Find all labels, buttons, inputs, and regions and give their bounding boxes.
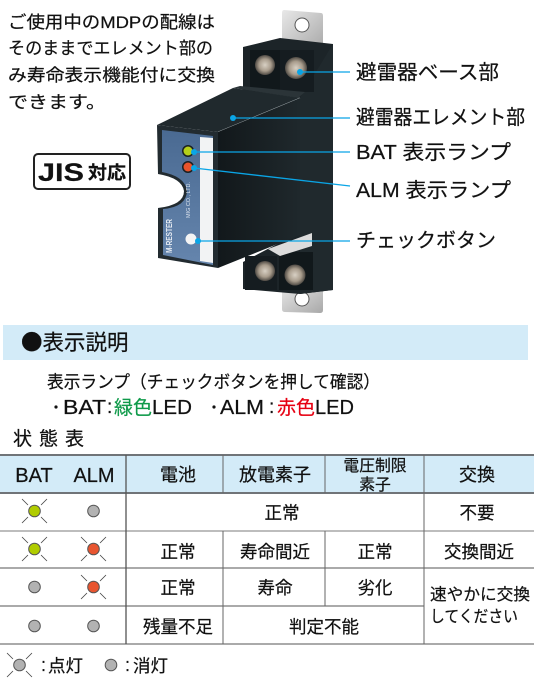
table header row: BAT xyxy=(15,465,53,487)
row 1 text xyxy=(264,503,494,523)
bottom terminals xyxy=(245,233,313,290)
row 3 text xyxy=(160,578,392,598)
lamp description: LED xyxy=(315,396,354,419)
product photo: surge arrester device xyxy=(157,10,333,313)
legend: 消灯 xyxy=(133,656,168,676)
callout: arrester element: 避雷器エレメント部 xyxy=(356,106,525,129)
lamp description: : xyxy=(107,397,112,418)
element front frame xyxy=(157,125,218,268)
ALM lamp xyxy=(182,161,194,173)
intro text: ご使用中のMDPの配線は xyxy=(8,12,215,32)
table grid xyxy=(0,455,534,644)
callout: ALM lamp: ALM 表示ランプ xyxy=(356,179,511,202)
legend: : xyxy=(125,655,130,675)
row 2 lamps xyxy=(22,537,106,561)
table header row: 交換 xyxy=(459,465,495,485)
callout: check button: チェックボタン xyxy=(356,229,496,252)
intro text: そのままでエレメント部の xyxy=(8,39,213,58)
brand label on panel: M-RESTER xyxy=(165,219,174,253)
table header row: 素子 xyxy=(359,476,391,494)
legend: 点灯 xyxy=(48,656,83,676)
lamp description: ALM xyxy=(220,396,264,419)
callout: arrester base: 避雷器ベース部 xyxy=(356,61,499,84)
table header row: 放電素子 xyxy=(239,465,311,485)
bottom mounting bracket xyxy=(282,285,323,313)
element top face xyxy=(157,88,300,132)
callout: check button xyxy=(195,229,496,252)
callout: arrester base xyxy=(297,61,499,84)
section heading bar xyxy=(3,325,528,360)
BAT lamp xyxy=(182,145,194,157)
lamp description: 表示ランプ（チェックボタンを押して確認） xyxy=(47,372,380,392)
row 4 text: 判定不能 xyxy=(289,617,359,637)
table header row: 電池 xyxy=(160,465,196,485)
row 4 lamps xyxy=(29,620,99,632)
row 4 text xyxy=(143,617,359,637)
legend xyxy=(7,653,168,677)
base rear body xyxy=(243,38,333,294)
row 1 text: 不要 xyxy=(460,503,494,523)
row 2 text: 正常 xyxy=(358,542,392,562)
callout: BAT lamp: BAT 表示ランプ xyxy=(356,141,511,164)
status table heading: 状態表 xyxy=(13,428,84,450)
lamp description xyxy=(47,372,380,419)
status table xyxy=(0,455,534,644)
row 2 text xyxy=(160,542,514,562)
check button xyxy=(186,234,196,244)
replace now merged cell xyxy=(430,585,530,626)
callout: arrester element xyxy=(230,106,525,129)
lamp description: 赤色 xyxy=(277,397,315,419)
lamp description: 緑色 xyxy=(114,397,152,419)
row 3 text: 劣化 xyxy=(358,578,392,598)
lamp description: : xyxy=(269,397,274,418)
intro text: み寿命表示機能付に交換 xyxy=(8,66,215,85)
JIS badge xyxy=(34,154,130,189)
callout: ALM lamp xyxy=(191,165,511,202)
row 2 text: 寿命間近 xyxy=(240,542,310,562)
replace now merged cell: してください xyxy=(430,607,518,626)
section heading bar: ●表示説明 xyxy=(21,326,129,357)
legend: : xyxy=(41,655,46,675)
top mounting bracket xyxy=(282,10,323,50)
row 1 lamps xyxy=(22,499,99,523)
lamp description: BAT xyxy=(63,396,107,419)
row 2 text: 正常 xyxy=(160,542,196,562)
callout: BAT lamp xyxy=(191,141,511,164)
table header row: 電圧制限 xyxy=(343,457,407,475)
row 3 text: 正常 xyxy=(160,578,196,598)
element side face xyxy=(218,98,300,268)
lamp description: LED xyxy=(152,396,192,419)
row 1 text: 正常 xyxy=(264,503,300,523)
white label strip xyxy=(200,137,213,263)
top terminals xyxy=(233,50,314,98)
row 2 text: 交換間近 xyxy=(444,542,514,562)
table header row xyxy=(0,455,534,494)
front blue panel xyxy=(162,130,213,265)
row 4 text: 残量不足 xyxy=(143,617,213,637)
replace now merged cell: 速やかに交換 xyxy=(430,585,530,604)
table header row: ALM xyxy=(73,465,115,487)
intro text: できます。 xyxy=(8,93,106,112)
intro text xyxy=(8,12,215,112)
product photo: surge arrester device: MIG CO., LTD. xyxy=(186,182,192,218)
row 3 text: 寿命 xyxy=(258,578,293,598)
row 3 lamps xyxy=(29,575,106,599)
JIS badge: 対応 xyxy=(88,163,126,183)
JIS badge: JIS xyxy=(38,159,84,187)
